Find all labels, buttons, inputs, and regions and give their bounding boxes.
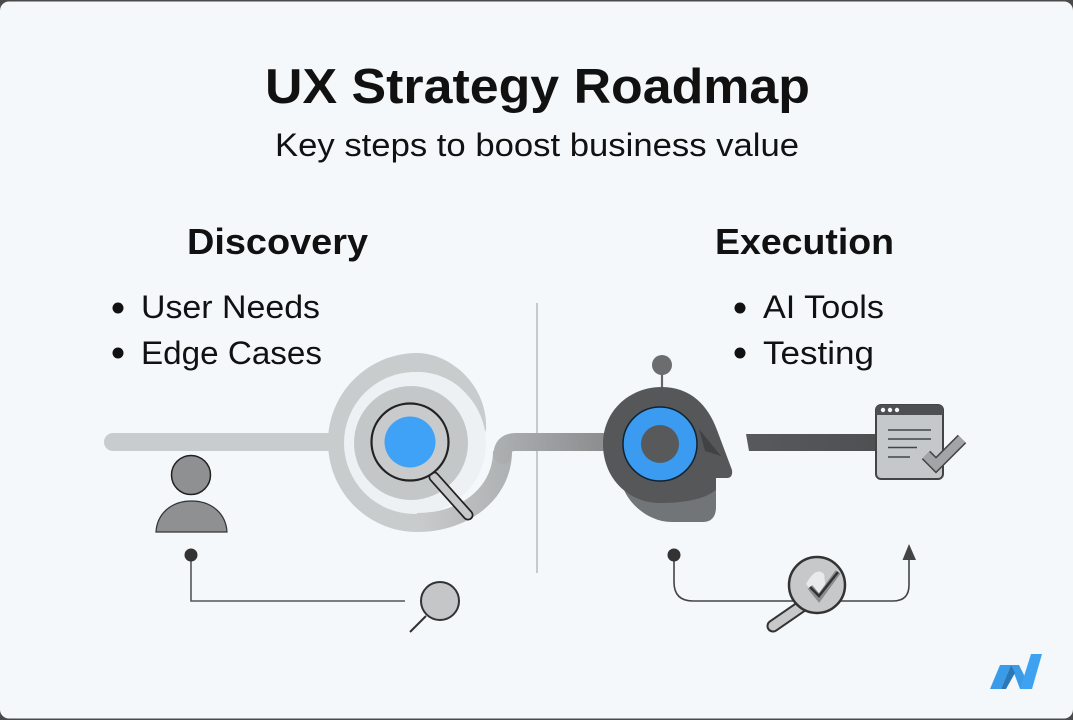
title: UX Strategy Roadmap (265, 60, 810, 114)
roadmap path: connector to AI head (502, 442, 606, 455)
list: Discovery items: Edge Cases (141, 335, 322, 371)
icon: magnifying glass with check (773, 557, 845, 626)
roadmap path: discovery bar (113, 433, 335, 451)
list: Discovery items: User Needs (141, 289, 320, 325)
icon: small magnifying glass (410, 582, 459, 632)
list: Execution items: AI Tools (763, 289, 884, 325)
icon: user (156, 456, 227, 532)
list: Execution items: Testing (763, 335, 874, 371)
logo (990, 654, 1042, 689)
icon: large magnifying glass (372, 404, 468, 515)
list: Execution items (734, 289, 884, 371)
center divider (536, 303, 538, 573)
connector: discovery flow (184, 548, 405, 601)
icon: AI robot head (603, 355, 732, 522)
list: Discovery items (112, 289, 322, 371)
heading: Discovery: Discovery (187, 221, 368, 262)
heading: Execution: Execution (715, 221, 894, 262)
roadmap path: spiral target rings (328, 353, 512, 532)
subtitle: Key steps to boost business value (275, 127, 799, 163)
icon: document with check (876, 405, 962, 479)
roadmap path: execution bar (746, 434, 880, 451)
connector: execution flow with arrow (668, 544, 916, 601)
